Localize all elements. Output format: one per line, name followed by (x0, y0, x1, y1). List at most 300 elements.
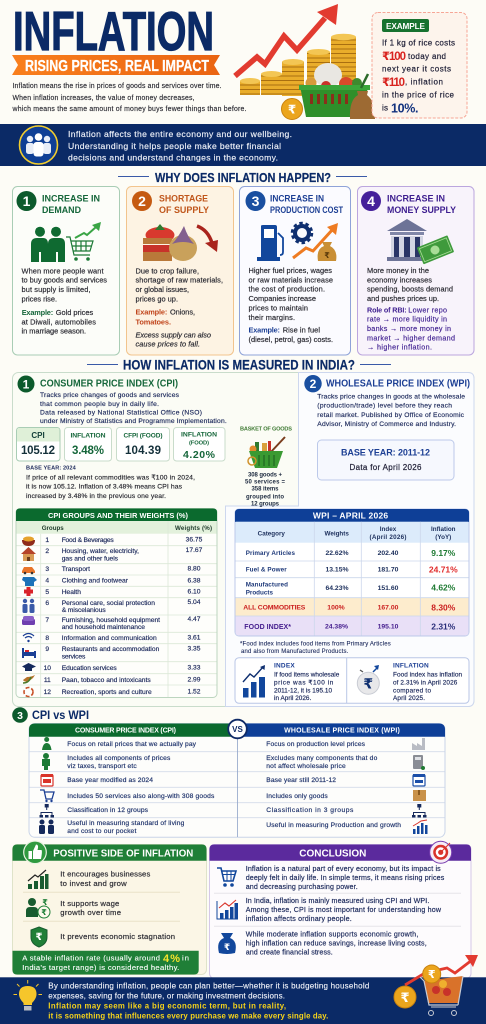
card text: in marriage season. (22, 327, 86, 336)
panel: increase in demand: 1 (23, 193, 31, 209)
card title (42, 194, 100, 216)
callout: stable inflation rate: A stable inflation rate (usually around (22, 954, 160, 962)
footer band: Inflation may seem like a big economic term, but in reality, (48, 1001, 286, 1010)
CPI description: that common people buy in daily life. (40, 401, 159, 408)
row: wage growth: It supports wage (60, 899, 119, 908)
CPI column text: Classification in 12 groups (67, 807, 149, 814)
table row numbers: 8 (45, 635, 49, 642)
table row numbers: 2 (45, 548, 49, 555)
card text: or global issues, (136, 285, 189, 294)
row: CPI and WPI (217, 897, 442, 923)
inflation text (393, 663, 462, 702)
WPI column headers: (YoY) (435, 534, 451, 541)
WPI description: Advisor, Ministry of Commerce and Industry. (317, 421, 456, 428)
stat: food inflation: INFLATION (181, 432, 217, 439)
index text: in April 2026. (274, 695, 312, 702)
heading: CPI vs WPI: 3 (17, 710, 23, 722)
WPI values (325, 550, 399, 630)
card text: Onions, (170, 308, 195, 317)
inflation text: Food index has inflation (393, 672, 462, 678)
ribbon subtitle: RISING PRICES, REAL IMPACT (25, 58, 209, 75)
WPI values: 64.23% (325, 585, 349, 592)
footer text (48, 982, 369, 1000)
footer band: it is something that influences every purchase we make every single day. (48, 1011, 328, 1020)
banner text: Understanding it helps people make better financial (68, 141, 281, 151)
basket text: 50 services = (245, 480, 285, 486)
comparison icons: WPI (412, 738, 428, 834)
stat: CFPI food (116, 428, 170, 461)
card text (367, 266, 453, 303)
card text: spending, boosts demand (367, 285, 453, 294)
row: moderate inflation (218, 931, 427, 957)
WPI values: 167.00 (378, 605, 399, 612)
table: WPI April 2026: FOOD INDEX* (244, 624, 291, 631)
row: CPI and WPI: inflation affects ordinary people. (246, 915, 352, 923)
WPI inflation values: 8.30% (431, 602, 456, 612)
card text: prices to maintain (248, 304, 308, 313)
card title: INCREASE IN (387, 194, 445, 204)
card text: Rise in fuel (283, 326, 320, 335)
table row labels: Health (62, 589, 81, 596)
WPI row labels: Manufactured (246, 582, 288, 588)
heading: how inflation is measured: HOW INFLATION IS MEASURED IN INDIA? (123, 356, 355, 372)
WPI values: 24.38% (325, 624, 348, 630)
table row numbers: 3 (45, 566, 49, 573)
CPI column text: Includes 50 services also along-with 308 goods (67, 793, 215, 800)
WPI column text: Excludes many components that do (266, 755, 378, 762)
WPI values: 151.60 (378, 585, 399, 592)
WPI column headers: Weights (325, 530, 349, 537)
CPI description: Data released by National Statistical Office (NSO) (40, 410, 202, 416)
card text: More money in the (367, 266, 429, 275)
index text: If food items wholesale (274, 672, 340, 678)
stat: food inflation: (FOOD) (189, 441, 209, 447)
table row labels: Housing, water, electricity, (62, 548, 139, 555)
heading: CPI vs WPI: CPI vs WPI (32, 710, 89, 722)
card text: Higher fuel prices, wages (248, 266, 332, 275)
intro text: When inflation increases, the value of money decreases, (12, 95, 195, 102)
WPI values: 195.10 (378, 624, 399, 630)
table row numbers: 5 (45, 589, 49, 596)
CPI column text (67, 741, 215, 835)
WPI base year box: Data for April 2026 (350, 463, 422, 472)
card text: Example: (136, 308, 167, 317)
panel: conclusion: CONCLUSION (299, 848, 366, 860)
index text: 2011-12, it is 195.10 (274, 688, 332, 694)
row: natural part of economy: and decreasing purchasing power. (246, 883, 358, 891)
card text: economy increases (367, 275, 432, 284)
card text: Example: (248, 326, 280, 335)
card title (270, 194, 343, 216)
row: CPI and WPI: Among these, CPI is most important for understanding how (246, 906, 442, 914)
card text: or raw materials increase (248, 275, 333, 284)
table row icons (21, 536, 37, 696)
table weights: 36.75 (186, 537, 203, 544)
row: moderate inflation: While moderate inflation supports economic growth, (246, 931, 418, 939)
title: INFLATION (13, 0, 214, 62)
row: natural part of economy: deeply felt in daily life. In simple terms, it means rising prices (246, 874, 445, 882)
icon: light bulb (14, 980, 42, 1010)
panel: basket of goods: BASKET OF GOODS (240, 427, 292, 433)
WPI description: Tracks price changes in goods at the wholesale (317, 394, 465, 400)
table weights: 6.10 (187, 589, 201, 596)
WPI row labels (246, 550, 295, 596)
table row numbers: 11 (44, 677, 51, 684)
card text: Due to crop failure, (136, 266, 199, 275)
table: CPI groups and weights (16, 508, 217, 698)
table row labels: Transport (62, 566, 90, 573)
basket text: 358 items (252, 487, 279, 493)
panel: increase in money supply: 4 (367, 193, 375, 209)
WPI column headers: Index (380, 526, 397, 533)
table row labels: gas and other fuels (62, 556, 119, 562)
WPI column text: Classification in 3 groups (266, 807, 354, 814)
stat: CFPI food: CFPI (FOOD) (124, 433, 162, 440)
callout: stable inflation rate (12, 951, 199, 974)
index text (274, 663, 340, 702)
table weights: 8.80 (187, 566, 201, 573)
banner text (68, 129, 292, 162)
panel: shortage of supply: 2 (138, 193, 146, 209)
table row labels (62, 537, 160, 696)
WPI column text: not affect wholesale price (266, 763, 346, 770)
table: WPI April 2026: ALL COMMODITIES (243, 605, 306, 612)
table: CPI groups and weights: Groups (42, 525, 64, 532)
icon: cart with coins and arrow: ₹ (428, 969, 436, 981)
panel: positive side of inflation: POSITIVE SIDE OF INFLATION (53, 848, 193, 860)
WPI values: 202.40 (378, 550, 399, 557)
WPI inflation values: 9.17% (431, 548, 456, 558)
panel: basket of goods (240, 427, 292, 508)
icon: bank and cash (387, 219, 454, 264)
table row labels: Furnishing, household equipment (62, 617, 160, 624)
footnote: and also from Manufactured Products. (241, 649, 349, 655)
index text: price was ₹100 in (274, 680, 334, 686)
row: wage growth: ₹ (42, 898, 48, 907)
panel: positive side of inflation (12, 841, 206, 974)
VS badge: VS (232, 725, 244, 734)
row: moderate inflation: high inflation can reduce savings, increase living costs, (246, 940, 427, 948)
WPI column text: Focus on production level prices (266, 741, 366, 748)
role of RBI text: market → higher demand (367, 333, 455, 342)
banner text: decisions and understand changes in the economy. (68, 152, 278, 162)
panel: wholesale price index: 2 (310, 377, 317, 391)
card title (387, 194, 457, 216)
card text: Excess supply can also (136, 330, 211, 339)
icon: target (430, 841, 452, 863)
example text: is (382, 104, 388, 113)
table row labels: services (62, 654, 86, 660)
WPI inflation values: 24.71% (429, 564, 458, 574)
CPI column text: and cost to our pocket (67, 828, 136, 835)
example callout (372, 12, 467, 118)
table weights: 5.04 (187, 599, 201, 606)
table weights (186, 537, 203, 696)
panel: increase in production cost (240, 186, 350, 355)
stat: CFPI food: 104.39 (125, 445, 161, 457)
card text: prices rise. (22, 294, 57, 303)
CPI description: Tracks price changes of goods and services (40, 392, 180, 399)
row: wage growth: growth over time (60, 908, 121, 917)
WPI values: 13.15% (325, 566, 349, 574)
table: CPI vs WPI comparison (29, 720, 445, 837)
table: CPI groups and weights: CPI GROUPS AND THEIR WEIGHTS (%) (48, 511, 188, 520)
icon: people (20, 126, 58, 164)
table weights: 1.52 (187, 689, 201, 696)
table: CPI groups and weights: Weights (%) (175, 525, 212, 532)
CPI description (40, 392, 227, 425)
row: moderate inflation: ₹ (224, 942, 230, 952)
table row numbers: 1 (45, 537, 49, 544)
row: prevents stagnation: It prevents economic stagnation (60, 932, 175, 941)
panel: consumer price index (16, 376, 227, 500)
panel: consumer price index: 1 (23, 378, 30, 392)
stat: inflation (64, 428, 112, 461)
CPI column text: viz taxes, transport etc (67, 763, 137, 770)
illustration: rising arrow, coins and basket (235, 4, 375, 120)
card title: PRODUCTION COST (270, 205, 343, 216)
table: CPI vs WPI comparison: WHOLESALE PRICE INDEX (WPI) (284, 728, 400, 735)
basket text: 12 groups (251, 502, 280, 508)
table row numbers: 9 (45, 646, 49, 653)
CPI description: under Ministry of Statistics and Programme Implementation. (40, 418, 227, 425)
inflation text: compared to (393, 688, 431, 694)
intro text: which means the same amount of money buys fewer things than before. (12, 106, 247, 113)
heading: why does inflation happen: WHY DOES INFLATION HAPPEN? (155, 171, 331, 185)
card title: INCREASE IN (42, 194, 100, 204)
table row labels: & miscelanious (62, 607, 106, 614)
row: moderate inflation: and create financial stress. (246, 949, 333, 957)
WPI description: (production/trade) level before they reach (317, 402, 452, 410)
table row labels: Education services (62, 665, 117, 672)
card text: When more people want (22, 266, 104, 275)
example text: in the price of rice (382, 90, 455, 100)
row: invest and grow: It encourages businesses (60, 870, 150, 879)
table weights: 17.67 (186, 547, 203, 554)
CPI column text: Useful in measuring standard of living (67, 820, 185, 827)
card text: at Diwali, automobiles (22, 317, 96, 326)
card title: DEMAND (42, 205, 81, 216)
card text: prices go up. (136, 294, 178, 303)
card title: SHORTAGE (159, 194, 208, 204)
card text: but supply is limited, (22, 285, 90, 294)
WPI column text: Includes only goods (266, 793, 328, 800)
table weights: 6.38 (187, 577, 201, 584)
icon: crate, onion and falling arrow (143, 224, 218, 261)
inflation text: April 2025. (393, 695, 425, 702)
table row labels: Recreation, sports and culture (62, 689, 152, 696)
banner: impact on economy (0, 124, 486, 166)
ribbon subtitle (12, 55, 220, 75)
WPI column text (266, 741, 401, 829)
table row numbers (44, 537, 51, 696)
card text: Gold prices (56, 308, 93, 317)
row: invest and grow: to invest and grow (60, 879, 127, 888)
example label: EXAMPLE (386, 22, 426, 31)
stat: CPI: CPI (31, 431, 45, 440)
WPI row labels: Products (246, 590, 273, 596)
stat: food inflation: 4.20% (183, 449, 216, 461)
table weights: 3.61 (187, 635, 201, 642)
basket text (245, 472, 285, 508)
table row labels: and household maintenance (62, 624, 145, 631)
row: natural part of economy: Inflation is a natural part of every economy, but its impact is (246, 865, 441, 873)
role of RBI text: Role of RBI: (367, 305, 407, 314)
role of RBI text: rate → more liquidity in (367, 315, 447, 324)
callout: stable inflation rate: India's target range) is considered healthy. (22, 963, 179, 972)
table row labels: Food & Beverages (62, 537, 114, 544)
card text: Example: (22, 308, 53, 317)
table row labels: Personal care, social protection (62, 600, 155, 607)
card text: to buy goods and services (22, 276, 107, 285)
role of RBI text: → higher inflation. (367, 343, 432, 352)
WPI description: retail market. Published by Office of Economic (317, 412, 465, 419)
CPI column text: Base year modified as 2024 (67, 777, 153, 784)
role of RBI text: banks → more money in (367, 324, 451, 333)
footnote: *Food index includes food items from Primary Articles (240, 641, 391, 647)
card text: Companies increase (248, 294, 316, 303)
row: prevents stagnation (31, 927, 175, 947)
row: wage growth: ₹ (41, 908, 47, 917)
footer band (0, 955, 486, 1024)
stat: CPI (16, 428, 60, 461)
panel: increase in money supply (358, 186, 474, 355)
table: CPI vs WPI comparison: CONSUMER PRICE INDEX (CPI) (75, 728, 176, 735)
inflation text: of 2.31% in April 2026 (393, 680, 458, 686)
table row labels: Information and communication (62, 635, 157, 642)
heading: CPI vs WPI (12, 707, 89, 723)
callout: stable inflation rate: in (182, 954, 189, 962)
WPI base year box (318, 440, 454, 480)
footnote (240, 641, 391, 655)
WPI column text: Useful in measuring Production and growth (266, 822, 401, 829)
footer text: expenses, saving for the future, or making investment decisions. (48, 991, 285, 1000)
footer text: By understanding inflation, people can plan better—whether it is budgeting household (48, 982, 369, 991)
table row labels: Clothing and footwear (62, 578, 129, 584)
example text (382, 39, 455, 116)
WPI values: 22.62% (325, 550, 349, 557)
WPI heading: WHOLESALE PRICE INDEX (WPI) (326, 379, 470, 390)
WPI inflation values (429, 548, 458, 631)
index text: INDEX (274, 663, 295, 670)
table row numbers: 7 (45, 617, 49, 624)
icon: fuel, gear, arrow and money bag (257, 223, 338, 261)
card text: and pushes prices up. (367, 294, 439, 303)
card title: INCREASE IN (270, 194, 324, 204)
table row numbers: 12 (44, 689, 51, 696)
panel: increase in production cost: 3 (252, 193, 260, 209)
WPI column headers: Inflation (431, 526, 456, 533)
table: WPI April 2026 (235, 509, 469, 636)
icon: people and cart (31, 222, 101, 262)
table row numbers: 10 (44, 665, 51, 672)
CPI column text: Focus on retail prices that we actually pay (67, 741, 197, 748)
intro text (12, 83, 247, 113)
WPI values: 100% (327, 605, 345, 612)
CPI heading: CONSUMER PRICE INDEX (CPI) (40, 379, 178, 390)
intro text: Inflation means the rise in prices of goods and services over time. (12, 83, 222, 90)
table row numbers: 6 (45, 600, 49, 607)
row: natural part of economy (217, 865, 445, 891)
example text: 10%. (391, 102, 418, 116)
card title: OF SUPPLY (159, 205, 210, 216)
example text: ₹100 (382, 51, 406, 63)
inflation text: INFLATION (393, 663, 429, 670)
WPI row labels: Fuel & Power (246, 566, 287, 574)
WPI column headers: (April 2026) (370, 534, 406, 541)
CPI base year note: it is now 105.12. Inflation of 3.48% means CPI has (26, 484, 183, 490)
icon: cart with coins and arrow: ₹ (400, 990, 410, 1005)
card text (136, 266, 223, 349)
icon: rupee with arrows: ₹ (363, 676, 373, 692)
panel: increase in demand (12, 186, 120, 355)
row: CPI and WPI: In India, inflation is mainly measured using CPI and WPI. (246, 897, 429, 905)
panel: wholesale price index (304, 375, 470, 480)
WPI column headers: Category (258, 530, 285, 537)
panel: conclusion (210, 841, 471, 978)
card text (248, 266, 333, 344)
WPI values: 181.70 (378, 566, 399, 574)
basket text: grouped into (246, 494, 284, 500)
icon: cart with coins and arrow (394, 955, 478, 1016)
row: wage growth (26, 898, 121, 918)
icon: fuel, gear, arrow and money bag: ₹ (324, 251, 330, 260)
role of RBI text (367, 305, 455, 352)
icon: grocery basket (248, 437, 285, 468)
CPI base year note (26, 466, 195, 500)
CPI column text: Includes all components of prices (67, 755, 171, 762)
CPI base year note: increased by 3.48% in the previous one year. (26, 493, 166, 500)
example text: today and (408, 52, 446, 61)
card text: (diesel, petrol, gas) costs. (248, 335, 333, 344)
card text: the cost of production. (248, 285, 325, 294)
example text: next year it costs (382, 65, 451, 74)
stat: CPI: 105.12 (21, 445, 55, 457)
example text: If 1 kg of rice costs (382, 39, 455, 48)
role of RBI text: Lower repo (408, 305, 447, 314)
card text: shortage of raw materials, (136, 276, 223, 285)
comparison icons: CPI (39, 737, 54, 834)
table weights: 3.35 (187, 645, 201, 652)
table weights: 4.47 (187, 616, 201, 623)
VS badge (228, 720, 247, 738)
table weights: 3.33 (187, 665, 201, 672)
stat: inflation: 3.48% (72, 445, 104, 457)
WPI row labels: Primary Articles (246, 550, 295, 557)
WPI base year box: BASE YEAR: 2011-12 (341, 447, 430, 457)
card text: their margins. (248, 313, 295, 322)
example text: , inflation (405, 78, 443, 87)
table row labels: Restaurants and accommodation (62, 646, 160, 653)
card title (159, 194, 210, 216)
panel: shortage of supply (126, 186, 234, 355)
basket text: 308 goods + (248, 472, 282, 478)
table row numbers: 4 (45, 578, 49, 584)
example text: ₹110 (382, 77, 405, 89)
card title: MONEY SUPPLY (387, 205, 457, 216)
WPI column text: Base year still 2011-12 (266, 777, 336, 784)
illustration: rising arrow, coins and basket: ₹ (288, 102, 296, 116)
WPI column headers (258, 526, 456, 541)
panel: index and inflation explanation (235, 658, 469, 703)
card text (22, 266, 107, 336)
card text: cause prices to fall. (136, 340, 200, 349)
table: WPI April 2026: WPI – APRIL 2026 (313, 511, 388, 521)
card text: Tomatoes. (136, 317, 171, 326)
row: invest and grow (28, 870, 150, 889)
icon: rising bars (243, 665, 265, 698)
banner text: Inflation affects the entire economy and our wellbeing. (68, 129, 292, 139)
